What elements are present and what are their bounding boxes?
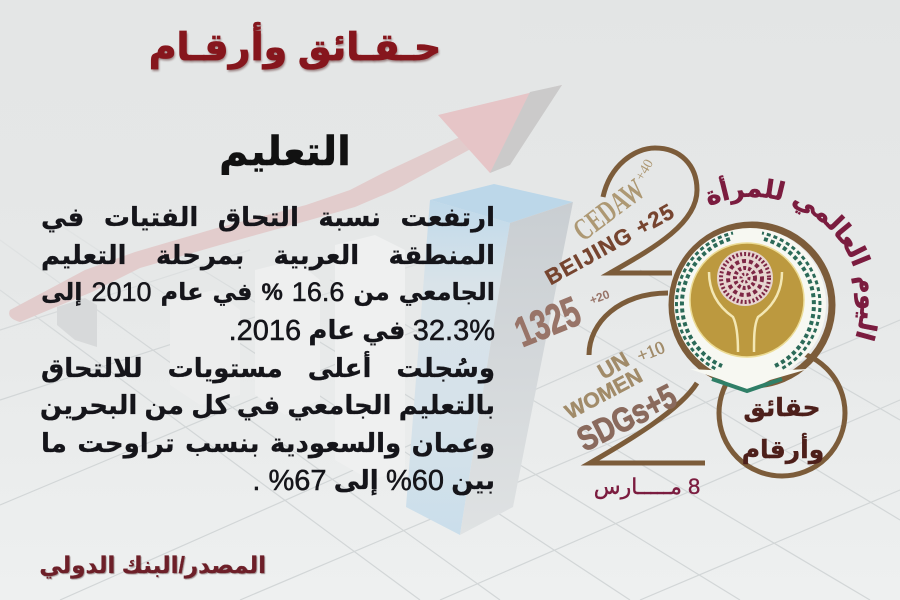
body text block: الجامعي من 16.6 % في عام 2010 إلى <box>41 277 495 307</box>
emblem <box>674 228 826 392</box>
tree <box>709 272 782 352</box>
body text block: وعمان والسعودية بنسب تراوحت ما <box>41 428 495 458</box>
date: 8 مارس: 8 مـــــارس <box>594 474 700 500</box>
label: BEIJING +25: BEIJING +25 <box>541 199 678 290</box>
circle caption: حقائق وأرقام: وأرقام <box>742 433 824 465</box>
numerals 2020 drawn as rings <box>589 148 845 476</box>
label: CEDAW +40: CEDAW <box>566 172 651 248</box>
body text block: المنطقة العربية بمرحلة التعليم <box>41 240 495 270</box>
label: UN WOMEN +10: WOMEN <box>561 364 646 424</box>
red trend arrow <box>9 85 562 322</box>
title: حـقـائق وأرقـام <box>149 27 441 69</box>
pale background bars <box>57 235 405 480</box>
section heading: التعليم <box>219 130 351 174</box>
body text block <box>40 202 495 497</box>
label: UN WOMEN +10: UN <box>593 347 633 384</box>
body text block: وسُجلت أعلى مستويات للالتحاق <box>41 353 495 383</box>
circle caption: حقائق وأرقام: حقائق <box>743 393 821 423</box>
calligraphy roundel <box>717 250 773 306</box>
curved heading: اليوم العالمي للمرأة: اليوم العالمي للمرأة <box>707 175 878 342</box>
body text block: 32.3% في عام 2016. <box>229 315 495 347</box>
label: UN WOMEN +10: +10 <box>634 337 668 366</box>
circle caption: حقائق وأرقام <box>742 393 824 465</box>
body text block: بين 60‏% إلى 67‏% . <box>252 465 495 497</box>
label: CEDAW +40: +40 <box>633 157 657 183</box>
wreath <box>676 233 820 369</box>
label: 1325 +20: +20 <box>588 287 612 307</box>
body text block: بالتعليم الجامعي في كل من البحرين <box>40 390 495 420</box>
label: UN WOMEN +10 <box>561 337 668 424</box>
label: SDGs +5: SDGs+5 <box>571 377 683 459</box>
body text block: ارتفعت نسبة التحاق الفتيات في <box>41 202 495 232</box>
blue 3D bar <box>406 184 573 535</box>
open book ribbon <box>690 369 808 392</box>
source note: المصدر/البنك الدولي <box>39 552 266 578</box>
label: 1325 +20: 1325 <box>508 287 587 356</box>
